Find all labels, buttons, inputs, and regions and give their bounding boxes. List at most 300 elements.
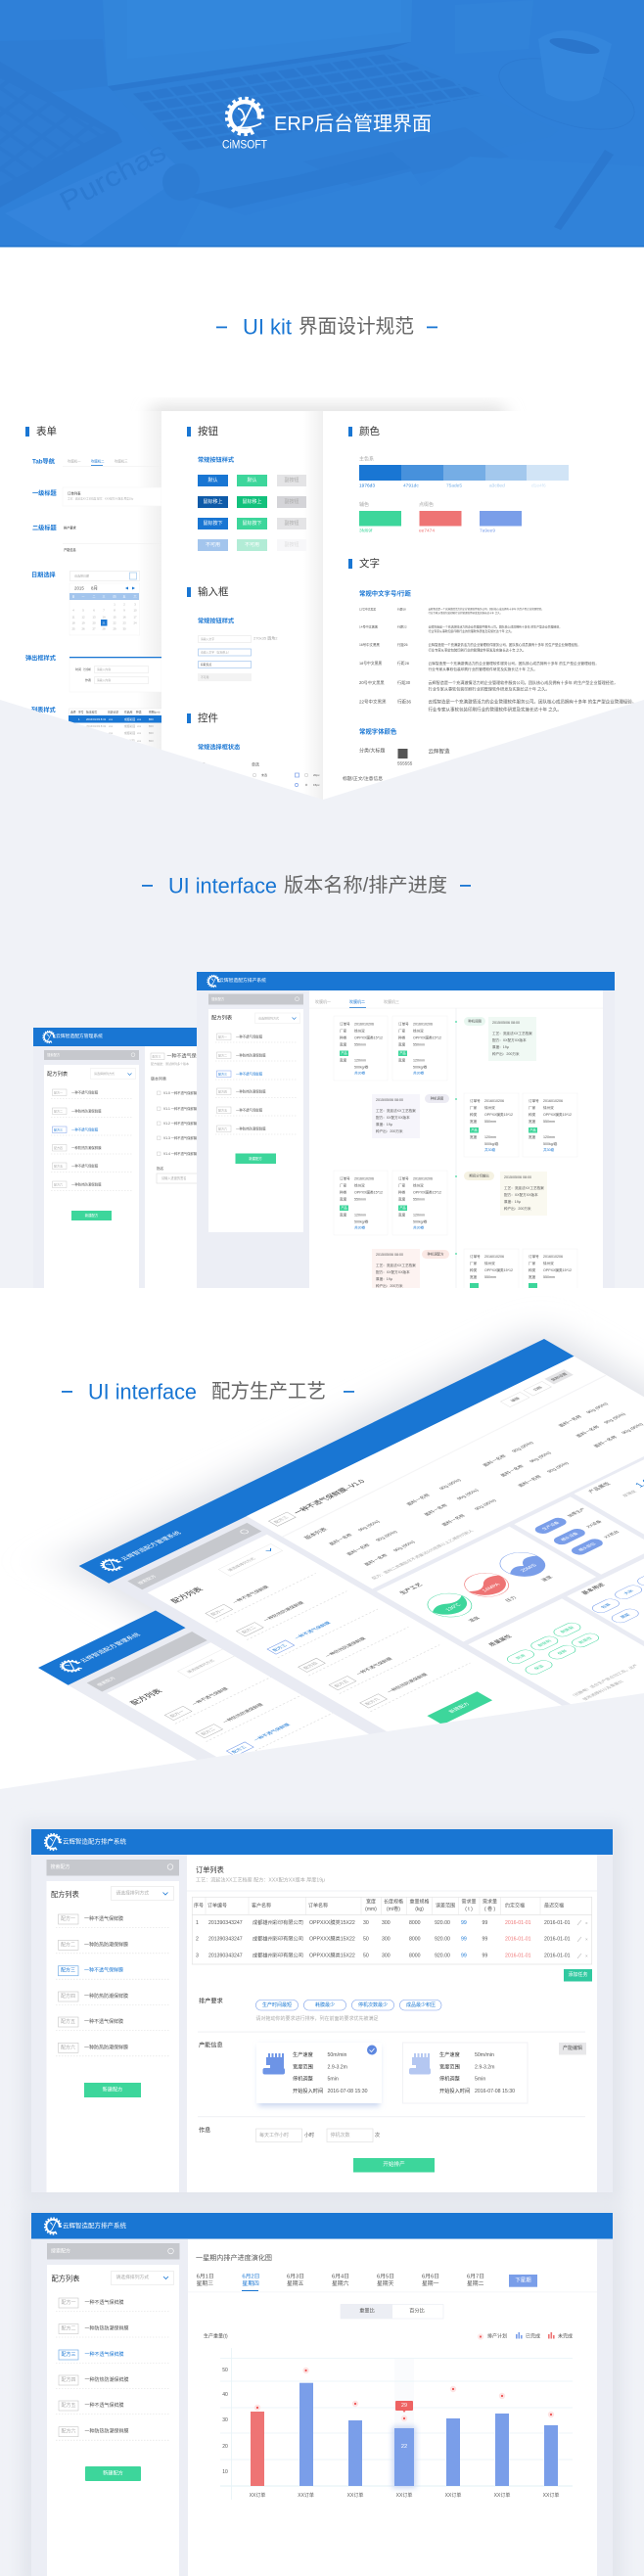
form: date picker: 二 — [92, 595, 96, 599]
form: date picker: 5 — [82, 609, 84, 613]
type scale rows: 行业专家从事软包装印刷行业的管理软件研发及实施长达十年 之久。 — [429, 707, 562, 713]
section heading: formula process: 配方生产工艺 — [211, 1380, 326, 1403]
formula list: 一种不透气保鲜膜 — [84, 2018, 123, 2025]
form: date picker: 20 — [92, 621, 96, 624]
font colour sample: 标题/正文/注意信息 — [343, 775, 383, 782]
chart legend — [204, 2332, 573, 2340]
order card — [464, 1093, 519, 1157]
window shadow — [22, 2206, 622, 2576]
order card: 宽度 — [398, 1058, 406, 1063]
order table: (kg) — [415, 1907, 424, 1912]
order table: 长度规格 — [384, 1899, 403, 1905]
info box: 厚度：19μ — [376, 1122, 392, 1127]
order card: 宽度 — [529, 1134, 536, 1139]
search bar: 搜索配方 — [51, 2247, 70, 2255]
back window list: 一种不透气保鲜膜 — [252, 1723, 292, 1742]
buttons grid: 副按钮 — [284, 477, 299, 483]
formula list: 一种防热防潮保鲜膜 — [71, 1145, 102, 1150]
chart legend: 已完成 — [526, 2333, 540, 2339]
back window logo — [56, 1658, 86, 1674]
form: tab navigation: 吹膜机二 — [91, 458, 105, 464]
order card: 厂家 — [470, 1261, 478, 1265]
buttons grid — [198, 475, 306, 551]
order card: 种类 — [470, 1112, 478, 1117]
gauge: pressure: 14MPA — [482, 1583, 502, 1593]
chart legend: 生产重量(t) — [204, 2333, 228, 2339]
order table: × — [585, 1920, 588, 1926]
info box — [372, 1094, 420, 1138]
formula list: 配方六 — [54, 1181, 63, 1186]
order card: 厂家 — [529, 1261, 536, 1265]
window: schedule progress — [197, 972, 615, 1312]
start scheduling button — [353, 2158, 435, 2173]
panel: basic usage — [567, 1485, 644, 1712]
info box: 工艺：流延法XX工艺档案 — [504, 1185, 544, 1190]
back window list: 一种不透气保鲜膜 — [190, 1686, 230, 1707]
form: list table style: 种类 — [136, 711, 142, 714]
form: first level title: 一级标题 — [32, 489, 58, 497]
form: first level title — [32, 487, 161, 506]
bar chart: XX订单 — [396, 2492, 412, 2499]
order card: 120mm — [354, 1059, 366, 1063]
formula detail panel: 配方三 — [272, 1515, 291, 1525]
panel: quality attributes: 耐高性 — [576, 1635, 595, 1645]
order table: × — [585, 1954, 588, 1958]
order card: 550mm — [484, 1275, 496, 1279]
day tabs: 星期四 — [242, 2280, 259, 2287]
capacity card: 50m/min — [475, 2052, 494, 2058]
secondary and accent colours: 点缀色 — [419, 501, 434, 508]
formula list: 配方六 — [61, 2428, 76, 2435]
order card — [523, 1249, 577, 1288]
formula detail panel: 面料一名称 — [575, 1424, 602, 1439]
order table: 订单名称 — [308, 1903, 328, 1909]
form: popup style: 作者 — [85, 677, 91, 682]
formula list: 请选择排列方式 — [94, 1071, 115, 1076]
order card: OPPXX膜类15*12 — [484, 1112, 513, 1117]
order list heading — [187, 1865, 597, 1892]
order table: ( 卷 ) — [484, 1906, 495, 1912]
main content — [188, 2239, 597, 2576]
heading: 颜色: 颜色 — [359, 425, 380, 437]
formula list: 配方四 — [61, 2376, 76, 2383]
formula detail panel: 配方：面料二类需贴在不透量达500克膜以上乙烯的切割人 — [370, 1528, 476, 1581]
type scale rows: 云辉智造是一个充满激情活力的企业管理软件服务公司。团队核心成员拥有十多年 的生产型企业管理经验， — [429, 642, 580, 647]
order card: 550mm — [413, 1198, 425, 1202]
order table: 2016-01-01 — [505, 1920, 531, 1926]
formula list: 一种防热防潮保鲜膜 — [236, 1126, 266, 1130]
order table: 920.00 — [435, 1920, 450, 1926]
panel: 表单 — [0, 411, 162, 803]
formula list: 一种不透气保鲜膜 — [236, 1071, 263, 1076]
type scale rows: 行距18 — [397, 607, 406, 611]
heading: 输入框: 输入框 — [198, 585, 229, 598]
order card — [523, 1093, 577, 1157]
header — [31, 2213, 613, 2239]
status pill: 种机调配方 — [428, 1251, 444, 1257]
back window list: 配方一 — [168, 1709, 187, 1719]
order card: 550mm — [484, 1120, 496, 1124]
panel: 颜色 文字 — [323, 411, 644, 803]
formula detail panel: 90g (95%) — [438, 1478, 463, 1491]
formula list: 配方二 — [240, 1625, 258, 1634]
panel: basic usage: 大米 — [621, 1588, 636, 1596]
order card: 种类 — [470, 1267, 478, 1272]
form: list table style: 1 — [78, 717, 80, 721]
form: tab navigation: 吹膜机三 — [115, 458, 128, 464]
hero title: ERP后台管理界面 — [274, 113, 432, 135]
order card: 宽度 — [398, 1197, 406, 1202]
formula detail panel: 面料一名称 — [592, 1435, 620, 1449]
order card: 500kg/卷 — [354, 1065, 369, 1070]
order card: 徐州双 — [354, 1183, 365, 1188]
formula detail panel: 90g (95%) — [529, 1451, 553, 1464]
order card: 550mm — [543, 1275, 555, 1279]
status pill — [464, 1017, 485, 1026]
type scale rows: 12号中文黑黑 — [359, 607, 376, 611]
order card: 500kg/卷 — [543, 1141, 558, 1146]
formula list: 配方四 — [301, 1661, 320, 1671]
search bar: 搜索配方 — [211, 996, 225, 1001]
buttons grid: 默认 — [207, 477, 218, 483]
version detail: V1.2 一种不透气保鲜膜 — [163, 1121, 198, 1126]
form: date picker: 8月 — [91, 585, 98, 591]
formula detail panel: 面料一名称 — [345, 1542, 372, 1556]
type scale rows: 行业专家从事软包装印刷行业的管理软件研发及实施长达十年 之久。 — [429, 667, 537, 671]
type scale rows: 云辉智造是一个充满激情活力的企业管理软件服务公司。团队核心成员拥有十多年 的生产型企业管理经验， — [429, 679, 618, 685]
back window list: 配方列表 — [127, 1687, 164, 1706]
order card: 550mm — [354, 1198, 366, 1202]
order table: 8000 — [409, 1920, 421, 1926]
heading: 表单: 表单 — [36, 425, 57, 437]
section heading: UI kit: 界面设计规范 — [299, 315, 414, 338]
schedule inputs: 停机次数 — [331, 2132, 350, 2139]
type scale rows: 云辉智造是一个充满激情活力的企业管理软件服务公司。团队核心成员拥有十多年 的生产型企业管理经验， — [429, 624, 562, 628]
formula list: 配方列表 — [47, 1070, 69, 1078]
formula list: 配方四 — [54, 1145, 63, 1150]
buttons grid: 不可用 — [245, 542, 259, 548]
form: date picker: 27 — [92, 626, 96, 630]
formula list: 一种不透气保鲜膜 — [354, 1656, 394, 1677]
input states — [198, 634, 278, 681]
gauge: temperature — [419, 1588, 493, 1629]
scheduling requirements: 排产要求 — [199, 1997, 223, 2004]
screen: schedule evolution chart — [31, 2213, 613, 2576]
font colour sample — [343, 748, 450, 782]
capacity card — [403, 2043, 528, 2103]
form: tab navigation: Tab导航 — [32, 458, 56, 466]
formula list: 配方二 — [61, 2325, 76, 2331]
capacity edit button — [559, 2043, 586, 2055]
version detail: 配方描述：测试排列多个版本 — [151, 1061, 189, 1066]
order card: 2016010206 — [543, 1099, 563, 1103]
formula list: 配方五 — [61, 2402, 76, 2409]
type scale rows: 22号中文黑黑 — [359, 699, 387, 705]
white section background — [0, 1288, 644, 1797]
header: 云辉智造配方排产系统 — [63, 2221, 127, 2230]
subheading: button styles: 常规按钮样式 — [198, 456, 235, 464]
order card — [334, 1016, 388, 1081]
logo: CiMSOFT gear — [222, 98, 267, 151]
order card: 2016010206 — [543, 1255, 563, 1259]
panel: equipment: 加厚生产 — [566, 1506, 588, 1518]
status pill: 种机间隔 — [468, 1018, 482, 1024]
window header — [197, 972, 615, 990]
formula list: 配方一 — [208, 1607, 227, 1617]
order card: 种类 — [340, 1190, 347, 1195]
version detail: V1.4 一种不透气保鲜膜 — [163, 1151, 198, 1156]
bar chart: 40 — [222, 2392, 228, 2398]
secondary and accent colours: 辅色 — [359, 501, 369, 508]
section heading: version and schedule: UI interface — [168, 873, 277, 898]
add task button — [564, 1969, 592, 1981]
order card: OPPXX膜类15*12 — [413, 1035, 441, 1040]
order card: 种类 — [529, 1112, 536, 1117]
formula list: 一种防热防潮保鲜膜 — [261, 1600, 306, 1623]
order card: 宽度 — [529, 1274, 536, 1279]
formula list — [148, 1535, 644, 1817]
formula list: 配方四 — [218, 1088, 227, 1093]
order table: 最迟交福 — [544, 1903, 564, 1909]
formula detail panel: 90g (95%) — [456, 1489, 481, 1501]
order card: 宽度 — [340, 1213, 347, 1218]
controls — [198, 761, 320, 787]
info box — [488, 1017, 536, 1061]
form: date picker: 2 — [123, 603, 125, 607]
capacity card selected: 2016-07-08 15:30 — [327, 2089, 368, 2094]
buttons grid: 鼠标移上 — [203, 498, 223, 505]
tooltip: 29 — [401, 2403, 407, 2409]
form: date picker: 10 — [133, 609, 137, 613]
version detail: 一种不透气保鲜膜 — [166, 1052, 207, 1059]
panel: product attributes: 产品属性 — [586, 1481, 613, 1495]
heading: 输入框 — [187, 585, 229, 598]
capacity card: 生产速度 — [439, 2050, 460, 2058]
secondary and accent colours: ee7474 — [419, 529, 435, 534]
input states: 270x35 圆角2 — [253, 634, 278, 640]
panel: quality attributes: 防滑 — [514, 1653, 529, 1661]
form: popup style — [25, 654, 161, 692]
primary colour palette: a3c8ed — [489, 483, 505, 489]
info box: 厚度：19μ — [376, 1276, 392, 1281]
formula list: 一种防热防潮保鲜膜 — [386, 1672, 430, 1694]
formula list: 配方五 — [61, 2018, 75, 2025]
hero banner — [0, 0, 644, 247]
order card: 订单号 — [340, 1176, 350, 1181]
input states: 获取焦点 — [201, 663, 211, 667]
buttons grid: 不可用 — [206, 542, 220, 548]
type scale rows: 18号中文黑黑 — [359, 661, 382, 666]
form: list table style — [31, 707, 162, 743]
formula list: 一种不透气保鲜膜 — [231, 1585, 271, 1605]
formula detail panel: 面料一名称 — [327, 1533, 354, 1546]
panel: quality attributes — [468, 1598, 644, 1761]
order card: 厂家 — [398, 1183, 406, 1188]
order card: 550mm — [413, 1043, 425, 1047]
formula list: 配方五 — [218, 1107, 227, 1112]
start scheduling button: 开始排产 — [383, 2160, 405, 2168]
form: date picker: 14 — [102, 615, 106, 619]
form: list table style: 作品库 — [124, 711, 133, 714]
formula detail panel: 90g (95%) — [357, 1520, 382, 1533]
order table: 300 — [382, 1920, 391, 1926]
version detail: V1.3 一种不透气保鲜膜 — [163, 1135, 198, 1140]
order card: 宽度 — [340, 1042, 347, 1047]
order card: 厂家 — [398, 1029, 406, 1034]
formula list: 配方二 — [54, 1108, 63, 1113]
form: tab navigation: 吹膜机一 — [68, 458, 81, 464]
chart legend: 排产计划 — [487, 2333, 507, 2339]
form: list table style: xxx — [109, 731, 114, 735]
formula list: 一种防热防潮保鲜膜 — [84, 2376, 129, 2383]
capacity card selected: 5min — [327, 2077, 339, 2083]
capacity card: 2.9-3.2m — [475, 2064, 494, 2070]
order card: 订单号 — [470, 1098, 481, 1103]
order table: 约定交福 — [505, 1903, 525, 1909]
order card: OPPXX膜类15*12 — [354, 1190, 383, 1195]
day tabs: 6月2日 — [242, 2273, 259, 2280]
order table: (mm) — [365, 1907, 377, 1912]
order card: 2016010206 — [484, 1099, 504, 1103]
order table: 2 — [196, 1937, 199, 1943]
version detail: 指名 — [157, 1166, 164, 1171]
day tabs: 星期六 — [332, 2279, 349, 2287]
order card: 厂家 — [470, 1105, 478, 1110]
isometric window: back — [38, 1603, 460, 1836]
order table: 成都雄州彩印有限公司 — [253, 1935, 303, 1943]
gauge: pressure: 压力 — [504, 1595, 519, 1603]
formula detail panel: 90g (95%) — [511, 1441, 535, 1453]
formula list: 请选择排列方式 — [115, 1889, 149, 1897]
order table: 3 — [196, 1954, 199, 1959]
buttons grid: 副按钮 — [284, 541, 299, 548]
form: list table style: 成都彩园 — [124, 731, 135, 735]
search bar: 搜索配方 — [47, 1052, 61, 1057]
section heading: version and schedule: 版本名称/排产进度 — [284, 874, 447, 897]
capacity card selected: 50m/min — [327, 2052, 347, 2058]
schedule main panel: 吹膜机二 — [349, 998, 365, 1004]
form: date picker: 7 — [103, 609, 105, 613]
status pill: 种机调度 — [431, 1096, 444, 1100]
scheduling requirements: 成品最少积压 — [406, 2001, 436, 2008]
type scale rows: 云辉智造是一个充满激情活力的企业管理软件服务公司。团队核心成员拥有十多年 的生产型企业管理经验， — [429, 661, 599, 666]
order card: 共30卷 — [354, 1225, 366, 1230]
order card: 产品 — [341, 1205, 347, 1210]
form: list table style: xxx — [137, 717, 142, 721]
gauge: pressure — [455, 1568, 529, 1609]
heading: 颜色 — [348, 425, 380, 437]
chart title: 一星期内排产进度演化图 — [196, 2253, 272, 2262]
form: date picker: 四 — [113, 595, 116, 599]
order table: 50 — [363, 1954, 369, 1959]
buttons grid: 鼠标按下 — [203, 520, 223, 527]
formula detail panel: 面料一名称 — [516, 1474, 543, 1488]
day tabs: 6月4日 — [332, 2273, 349, 2280]
order card: 订单号 — [529, 1254, 539, 1259]
order card: OPPXX膜类15*12 — [543, 1267, 572, 1272]
heading: 控件 — [187, 712, 218, 724]
buttons grid: 鼠标移上 — [242, 498, 262, 505]
order card: 550mm — [543, 1120, 555, 1124]
form: date picker: 21 — [102, 621, 106, 624]
add task button: 添加任务 — [568, 1971, 588, 1978]
panel: quality attributes: （抗静电）适合生产复合加工及。出产 — [568, 1663, 641, 1699]
formula list: 配方三 — [270, 1643, 289, 1652]
back window search bar — [87, 1625, 221, 1692]
toggle — [341, 2304, 443, 2319]
order table: 99 — [482, 1954, 487, 1959]
day tabs: 6月6日 — [422, 2273, 439, 2280]
form: tab navigation — [32, 458, 161, 466]
formula list: 配方三 — [61, 2351, 76, 2358]
font colour sample: 分类/大标题 — [359, 748, 385, 754]
order card: 共30卷 — [484, 1147, 496, 1152]
formula list: 配方六 — [218, 1126, 227, 1130]
type scale rows: 行业专家从事软包装印刷行业的管理软件研发及实施长达十年 之久。 — [429, 611, 502, 615]
order card: 120mm — [484, 1135, 496, 1139]
back window list — [122, 1645, 340, 1762]
order card: 厂家 — [340, 1183, 347, 1188]
order table: 2016-01-01 — [505, 1954, 531, 1959]
order card: 种类 — [398, 1190, 406, 1195]
formula list: 一种防热防潮保鲜膜 — [236, 1052, 266, 1057]
type scale rows: 云辉智造是一个充满激情活力的企业管理软件服务公司。团队核心成员拥有十多年 的生产型企业管理经验， — [429, 699, 636, 705]
form: list table style: 彩园 — [129, 739, 135, 743]
status pill — [422, 1250, 449, 1259]
input states: 请输入文字（鼠标移上） — [201, 651, 231, 655]
type scale rows: 云辉智造是一个充满激情活力的企业管理软件服务公司。团队核心成员拥有十多年 的生产型企业管理经验， — [429, 607, 544, 611]
form: popup style: 弹出框样式 — [25, 654, 57, 662]
status pill — [464, 1172, 494, 1180]
window shadow — [22, 1822, 622, 2204]
formula list: 一种不透气保鲜膜 — [84, 2299, 124, 2306]
back window list: 一种防热防潮保鲜膜 — [221, 1702, 265, 1725]
formula list: 配方五 — [54, 1163, 63, 1168]
formula list: 一种防热防潮保鲜膜 — [236, 1088, 266, 1093]
gauge: speed — [491, 1547, 566, 1588]
section heading: UI kit — [216, 315, 437, 339]
schedule inputs: 作息 — [199, 2126, 210, 2134]
formula list: 配方六 — [61, 2044, 75, 2050]
formula list: 请选择排列方式 — [225, 1556, 256, 1572]
formula detail panel: 90g (95%) — [375, 1530, 399, 1542]
order card: OPPXX膜类15*12 — [354, 1035, 383, 1040]
order card: 2016010206 — [413, 1177, 433, 1181]
formula detail panel: 面料一名称 — [405, 1493, 432, 1506]
formula list: 配方二 — [218, 1052, 227, 1057]
form: date picker: 9 — [123, 609, 125, 613]
main content — [187, 1855, 597, 2192]
day tabs: 下星期 — [515, 2277, 531, 2284]
panel: production process: 生产工艺 — [397, 1582, 425, 1595]
secondary and accent colours: 7a9ee9 — [480, 529, 495, 534]
order card: 宽度 — [470, 1119, 478, 1124]
order card: 宽度 — [340, 1197, 347, 1202]
capacity card selected: 停机调整 — [293, 2075, 313, 2083]
grey page background with cut — [0, 700, 644, 1288]
panel: product attributes — [574, 1431, 644, 1544]
formula list: 配方列表 — [211, 1014, 233, 1022]
order table: 误差范围 — [436, 1903, 455, 1909]
form: date picker: 8 — [114, 609, 115, 613]
order card: 徐州双 — [413, 1029, 424, 1034]
search bar — [208, 994, 303, 1004]
formula list — [47, 2265, 179, 2576]
formula list: 配方一 — [218, 1034, 227, 1038]
capacity information: 产能信息 — [199, 2042, 223, 2049]
order table: OPPXXX膜类15X22 — [309, 1935, 355, 1943]
panel: 按钮 输入框 控件 — [161, 411, 323, 803]
